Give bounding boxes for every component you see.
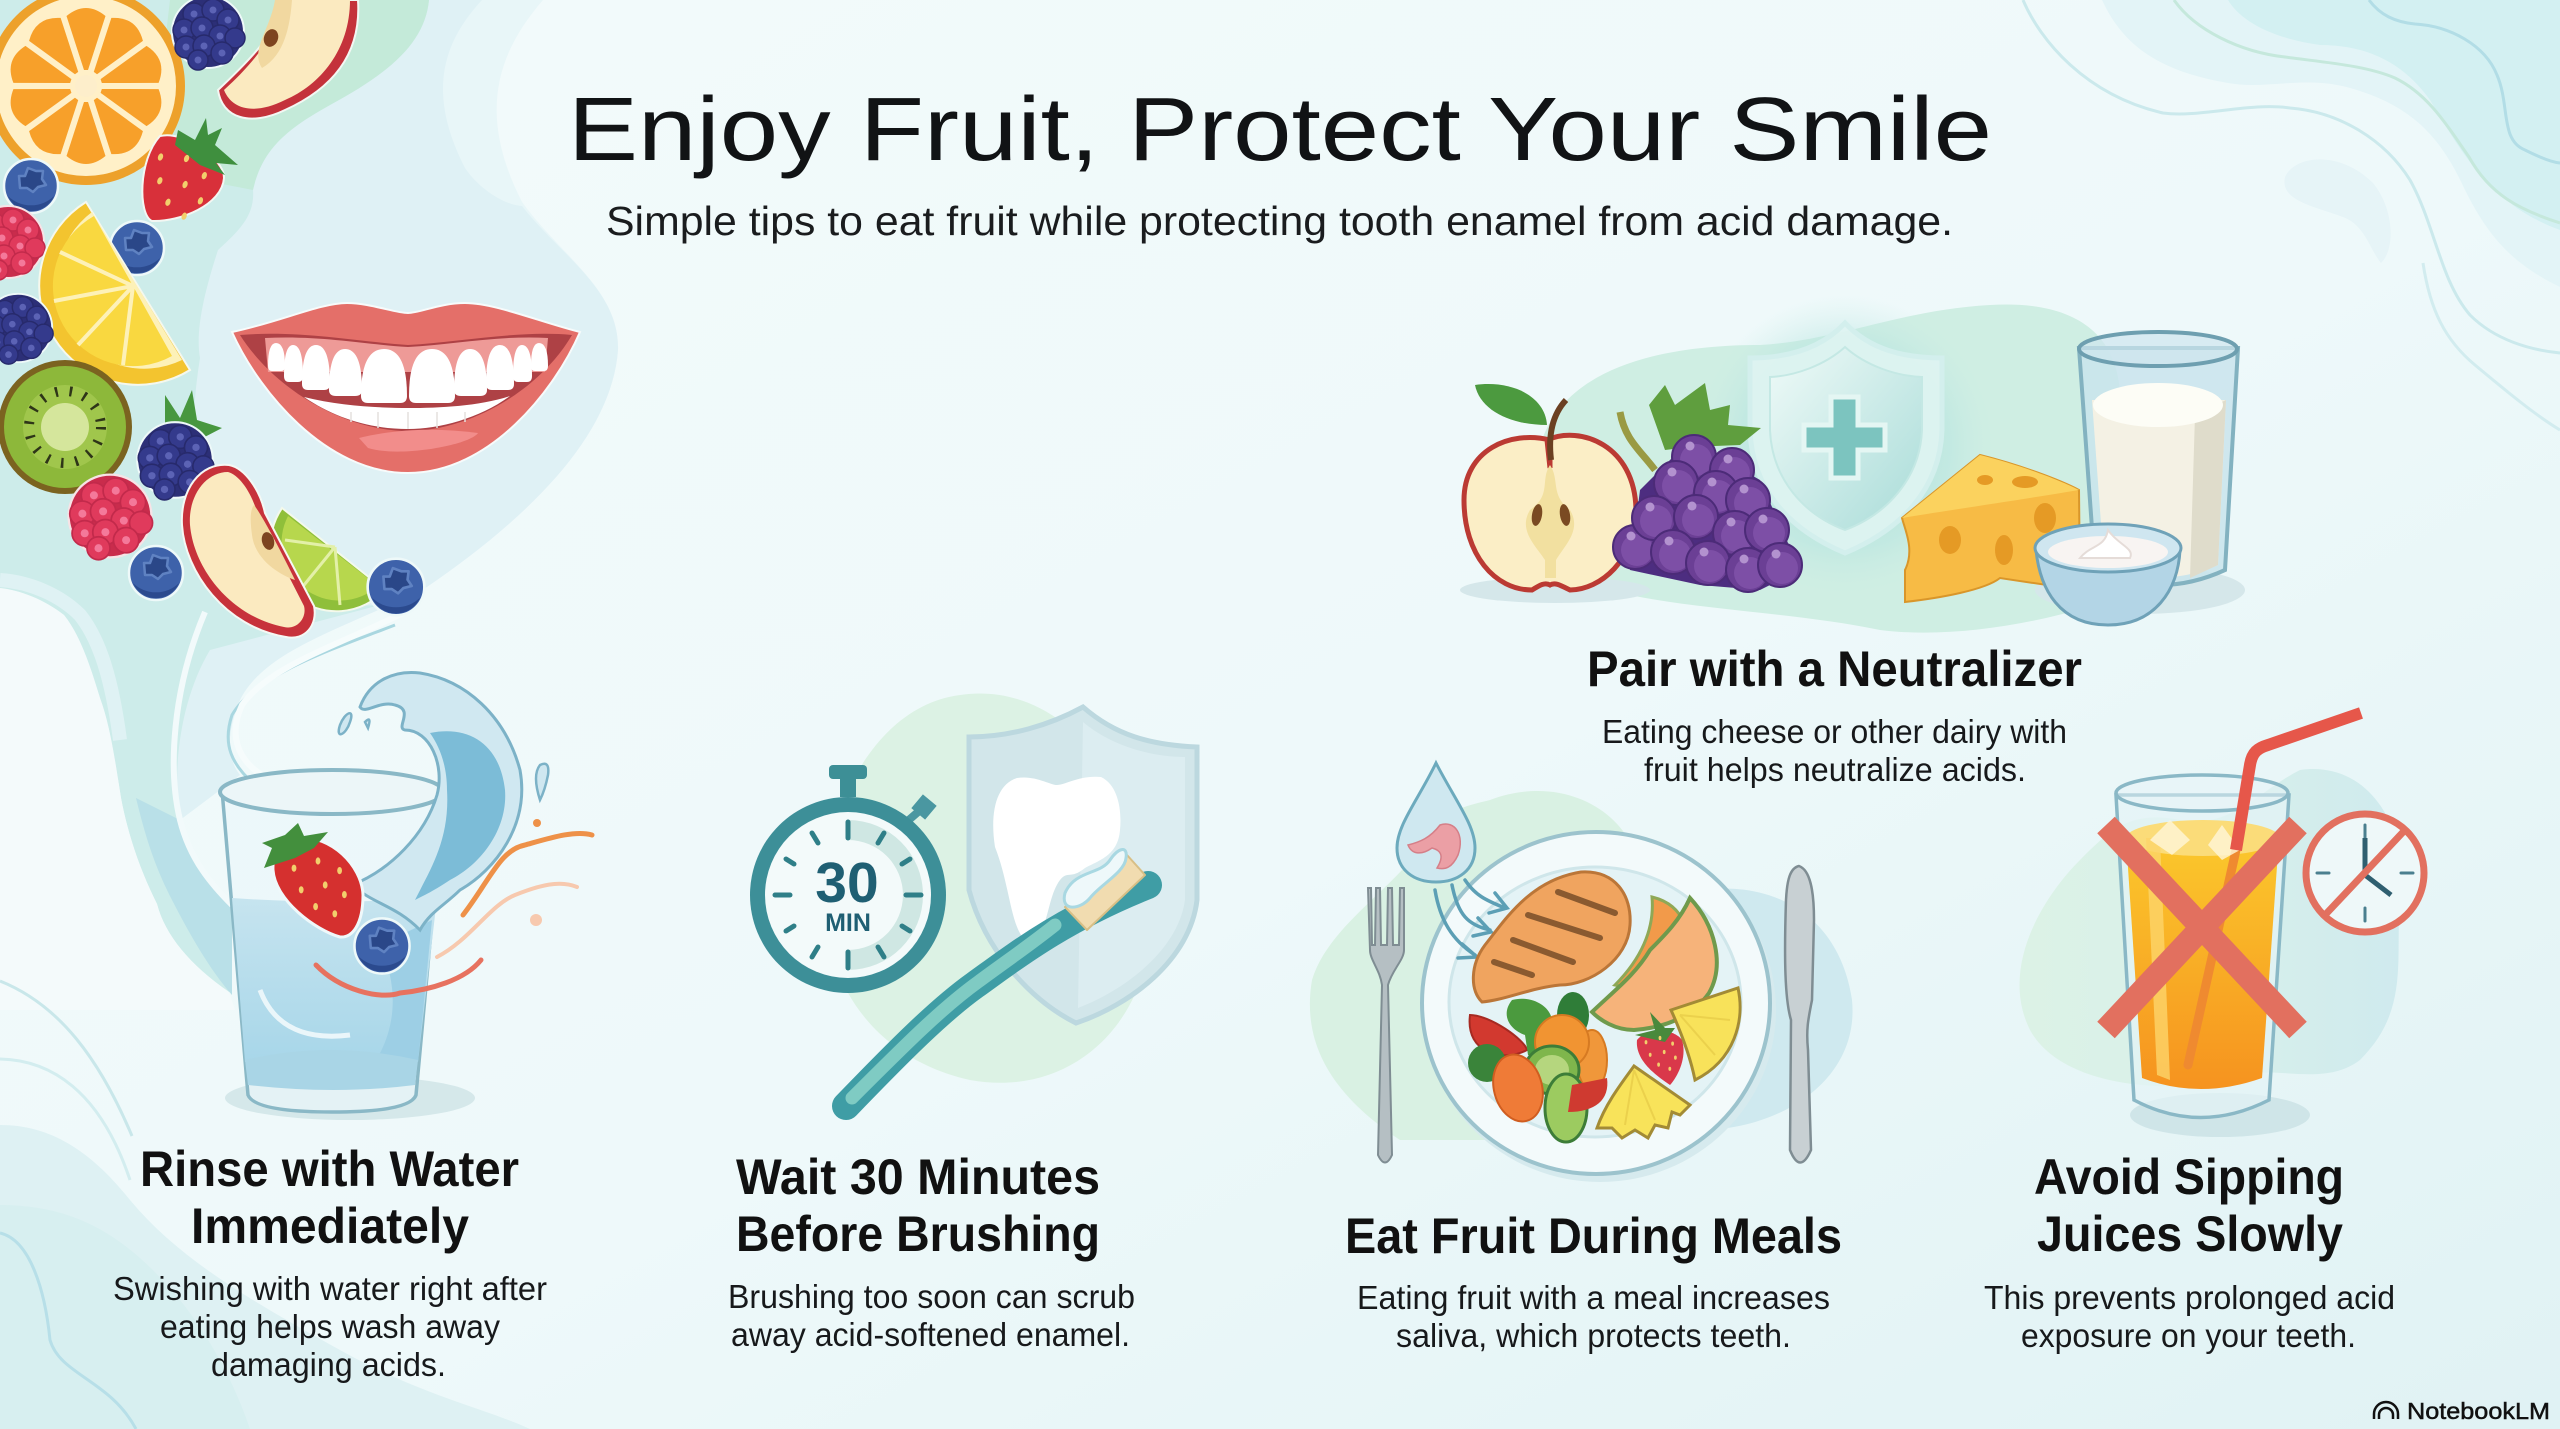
icon: fork [1368, 888, 1404, 1162]
panel: wait 30 minutes [728, 694, 1197, 1353]
background swirls: bottom left [0, 981, 530, 1429]
icon: green blob [825, 694, 1151, 1083]
icon: blackberry top [172, 0, 245, 70]
icon: grape leaf and stem [1620, 383, 1761, 470]
panel: eat fruit during meals [1310, 763, 1853, 1354]
icon: blue blob [1700, 888, 1853, 1130]
background swirls: top left [0, 0, 618, 1010]
icon: blueberry lower [129, 546, 183, 600]
heading: Before Brushing [736, 1206, 1100, 1262]
panel: pair with a neutralizer [1460, 295, 2245, 788]
icon: glass shadow [225, 1076, 475, 1120]
icon: milk glass [2079, 332, 2238, 585]
icon: plate [1422, 832, 1776, 1182]
text block [1357, 1279, 1830, 1354]
icon: pineapple lower [1597, 1066, 1690, 1138]
icon: blueberry by lime [368, 559, 424, 615]
icon: crossed-out clock [2306, 814, 2424, 932]
heading: Avoid Sipping [2034, 1149, 2344, 1205]
icon: stopwatch: 30 [815, 851, 879, 915]
icon: straw [2236, 713, 2361, 850]
text block: exposure on your teeth. [2021, 1317, 2356, 1354]
heading: Wait 30 Minutes [736, 1149, 1100, 1205]
icon: toothbrush [846, 850, 1148, 1106]
text block: Eating cheese or other dairy with [1602, 713, 2067, 750]
heading [736, 1149, 1100, 1262]
icon: blueberry [4, 159, 58, 213]
icon: yogurt bowl [2035, 524, 2181, 625]
text block: saliva, which protects teeth. [1396, 1317, 1791, 1354]
icon: raspberry left [0, 206, 45, 280]
icon: stopwatch: MIN [825, 909, 871, 937]
icon: colour blob [2020, 769, 2402, 1086]
text block [1602, 713, 2067, 788]
heading: Eat Fruit During Meals [1345, 1208, 1842, 1264]
icon: glass shadow [2130, 1093, 2310, 1137]
text block: eating helps wash away [160, 1308, 500, 1345]
background swirls: top right [2023, 0, 2560, 430]
icon: blackberry left [0, 294, 53, 364]
icon: water drops [339, 713, 548, 800]
icon: lime wedge [270, 508, 385, 611]
icon: apple slice top [218, 0, 358, 119]
icon: green blob [1310, 791, 1640, 1140]
icon: blueberry right of lemon [110, 221, 164, 275]
text block [728, 1278, 1135, 1353]
icon: pineapple upper [1671, 988, 1740, 1080]
text block: Brushing too soon can scrub [728, 1278, 1135, 1315]
text block [113, 1270, 547, 1383]
text block: away acid-softened enamel. [731, 1316, 1130, 1353]
icon: strawberry [141, 118, 238, 224]
title: Enjoy Fruit, Protect Your Smile [568, 80, 1992, 180]
icon: shadows [1460, 566, 2245, 614]
icon: shield glow [1695, 295, 1995, 595]
icon: strawberry in water [262, 823, 363, 937]
icon: wave core [415, 731, 505, 900]
text block: This prevents prolonged acid [1984, 1279, 2395, 1316]
icon: water wave [352, 672, 522, 930]
heading [140, 1141, 519, 1254]
icon: cantaloupe [1592, 897, 1717, 1030]
text block: Eating fruit with a meal increases [1357, 1279, 1830, 1316]
heading: Juices Slowly [2037, 1206, 2343, 1262]
panel: rinse with water [113, 672, 592, 1383]
icon: acid swirls [316, 819, 592, 995]
icon: blueberry in water [354, 918, 410, 974]
icon: lemon wedge [39, 202, 190, 385]
text block: Swishing with water right after [113, 1270, 547, 1307]
icon: water glass [220, 770, 444, 1112]
icon: flow arrows [1435, 880, 1507, 958]
icon: cheese [1902, 455, 2080, 602]
icon: salad [1468, 992, 1607, 1142]
icon: raspberry lower [69, 475, 153, 560]
icon: red x [2106, 825, 2298, 1030]
icon: juice glass [2116, 775, 2289, 1118]
icon: saliva drop [1397, 763, 1475, 882]
icon: stopwatch [750, 765, 946, 993]
heading: Pair with a Neutralizer [1587, 641, 2082, 697]
text block: damaging acids. [211, 1346, 446, 1383]
icon: grilled chicken [1473, 872, 1630, 1002]
icon: knife [1785, 866, 1814, 1162]
text block: fruit helps neutralize acids. [1644, 751, 2026, 788]
icon: strawberry on plate [1635, 1012, 1684, 1085]
icon: blackberry lower [137, 390, 222, 500]
fruit cluster [0, 0, 424, 638]
icon: orange slice [0, 0, 185, 185]
watermark: NotebookLM: NotebookLM [2407, 1398, 2550, 1424]
icon: shield [1750, 323, 1942, 553]
icon: apple slice lower [182, 465, 315, 638]
icon: apple half [1464, 384, 1636, 590]
icon: tooth [993, 777, 1120, 940]
heading: Immediately [191, 1198, 469, 1254]
icon: smiling mouth [232, 303, 580, 473]
panel: avoid sipping juices [1984, 713, 2424, 1354]
icon: grapes [1613, 435, 1802, 592]
text block [1984, 1279, 2395, 1354]
icon: kiwi [0, 360, 132, 494]
heading [2034, 1149, 2344, 1262]
heading: Rinse with Water [140, 1141, 519, 1197]
icon: shield [969, 707, 1197, 1023]
icon: green blob [1542, 304, 2140, 633]
subtitle: Simple tips to eat fruit while protecting tooth enamel from acid damage. [606, 198, 1953, 244]
